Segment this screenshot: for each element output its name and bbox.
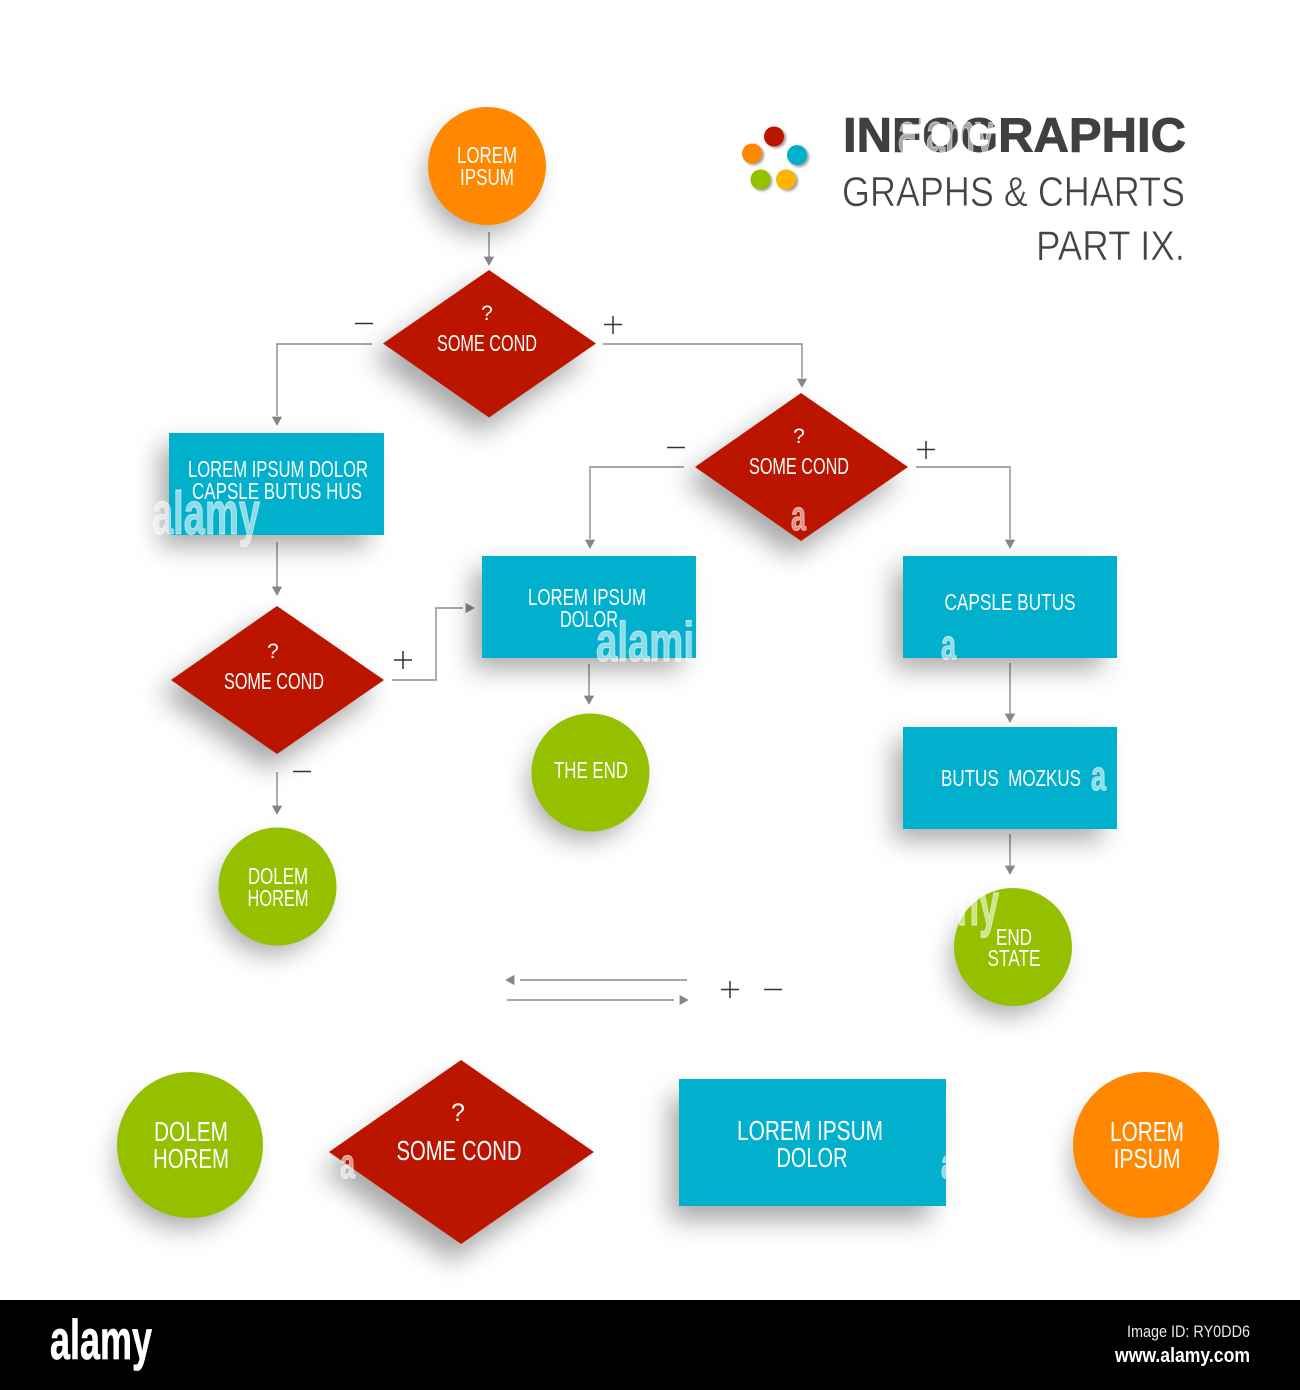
title: alamy bbox=[898, 101, 994, 164]
legend: red diamond bbox=[322, 1060, 594, 1262]
process box: lorem ipsum dolor capsle butus hus bbox=[152, 433, 384, 547]
process box: lorem ipsum dolor capsle butus hus: LOREM IPSUM DOLOR bbox=[188, 456, 368, 482]
legend: orange circle: IPSUM bbox=[1114, 1143, 1180, 1174]
connector: first decision plus branch bbox=[603, 344, 806, 387]
title: PART IX. bbox=[1036, 222, 1185, 269]
sign: minus, third decision bbox=[293, 770, 311, 772]
legend: orange circle: LOREM bbox=[1110, 1116, 1184, 1147]
decision diamond: first bbox=[372, 270, 596, 434]
connector: first decision minus branch bbox=[272, 344, 372, 425]
sign: minus, second decision bbox=[667, 446, 685, 448]
end circle: end state: ny bbox=[957, 871, 999, 938]
legend: blue box: LOREM IPSUM bbox=[737, 1115, 883, 1146]
connector: butus mozkus to end state bbox=[1006, 834, 1014, 874]
connector: third decision plus branch bbox=[392, 604, 474, 680]
sign: plus, second decision bbox=[917, 441, 935, 459]
connector: second decision minus branch bbox=[586, 467, 684, 548]
legend: plus sign bbox=[721, 981, 739, 998]
logo: five coloured dots bbox=[742, 126, 809, 191]
footer: image id: Image ID: RY0DD6 bbox=[1127, 1322, 1250, 1341]
connector: left box to third decision bbox=[272, 542, 282, 595]
decision diamond: second: ? bbox=[793, 425, 805, 448]
legend: green circle: DOLEM bbox=[154, 1116, 228, 1147]
decision diamond: first: ? bbox=[481, 302, 493, 325]
decision diamond: second bbox=[684, 393, 908, 557]
decision diamond: first: SOME COND bbox=[437, 330, 537, 356]
end circle: dolem horem bbox=[216, 828, 336, 954]
legend: orange circle bbox=[1073, 1072, 1219, 1228]
legend: blue box bbox=[670, 1079, 956, 1220]
legend: green circle bbox=[117, 1072, 263, 1228]
title: GRAPHS & CHARTS bbox=[842, 168, 1185, 215]
process box: lorem ipsum dolor capsle butus hus: CAPSLE BUTUS HUS bbox=[192, 478, 362, 504]
process box: lorem ipsum dolor bbox=[473, 556, 696, 673]
decision diamond: second: a bbox=[791, 492, 806, 539]
end circle: end state: STATE bbox=[988, 945, 1040, 971]
start circle: lorem ipsum: LOREM bbox=[457, 142, 517, 168]
legend: red diamond: ? bbox=[451, 1099, 465, 1127]
process box: butus mozkus: BUTUS MOZKUS bbox=[941, 765, 1081, 791]
end circle: the end: THE END bbox=[554, 757, 628, 783]
process box: butus mozkus bbox=[894, 727, 1117, 840]
legend: red diamond: a bbox=[340, 1140, 355, 1187]
legend: minus sign bbox=[764, 988, 782, 990]
sign: minus, first decision bbox=[355, 322, 373, 324]
sign: plus, first decision bbox=[604, 316, 622, 334]
process box: capsle butus: CAPSLE BUTUS bbox=[944, 589, 1076, 615]
legend: blue box: a bbox=[941, 1140, 956, 1187]
end circle: end state: END bbox=[996, 924, 1032, 950]
decision diamond: third: ? bbox=[267, 640, 279, 663]
process box: lorem ipsum dolor: LOREM IPSUM bbox=[528, 584, 646, 610]
title: INFOGRAPHIC bbox=[843, 108, 1186, 162]
title bbox=[842, 101, 1186, 269]
legend: blue box: DOLOR bbox=[776, 1142, 848, 1173]
process box: lorem ipsum dolor: alami bbox=[596, 610, 694, 673]
end circle: end state bbox=[952, 871, 1072, 1015]
decision diamond: third: SOME COND bbox=[224, 668, 324, 694]
decision diamond: second: SOME COND bbox=[749, 453, 849, 479]
legend: arrows bbox=[506, 976, 688, 1004]
process box: capsle butus bbox=[894, 556, 1117, 669]
sign: plus, third decision bbox=[394, 651, 412, 669]
end circle: the end bbox=[529, 714, 650, 840]
footer: alamy logo: alamy bbox=[50, 1308, 152, 1371]
process box: butus mozkus: a bbox=[1091, 752, 1106, 799]
connector: start to first decision bbox=[484, 232, 494, 265]
footer: website: www.alamy.com bbox=[1114, 1345, 1250, 1367]
start circle: lorem ipsum bbox=[426, 107, 546, 234]
connector: second decision plus branch bbox=[916, 467, 1014, 548]
connector: third decision minus branch bbox=[272, 772, 282, 814]
end circle: dolem horem: HOREM bbox=[248, 885, 308, 911]
legend: green circle: HOREM bbox=[153, 1143, 229, 1174]
process box: capsle butus: a bbox=[941, 621, 956, 668]
connector: middle box to the end bbox=[584, 664, 594, 704]
decision diamond: third bbox=[160, 606, 384, 770]
start circle: lorem ipsum: IPSUM bbox=[460, 164, 514, 190]
process box: lorem ipsum dolor: DOLOR bbox=[560, 606, 618, 632]
footer bar bbox=[0, 1300, 1300, 1390]
legend: red diamond: SOME COND bbox=[396, 1135, 522, 1166]
end circle: dolem horem: DOLEM bbox=[248, 863, 308, 889]
connector: capsle butus to butus mozkus bbox=[1006, 663, 1014, 722]
process box: lorem ipsum dolor capsle butus hus: alamy bbox=[152, 480, 260, 547]
